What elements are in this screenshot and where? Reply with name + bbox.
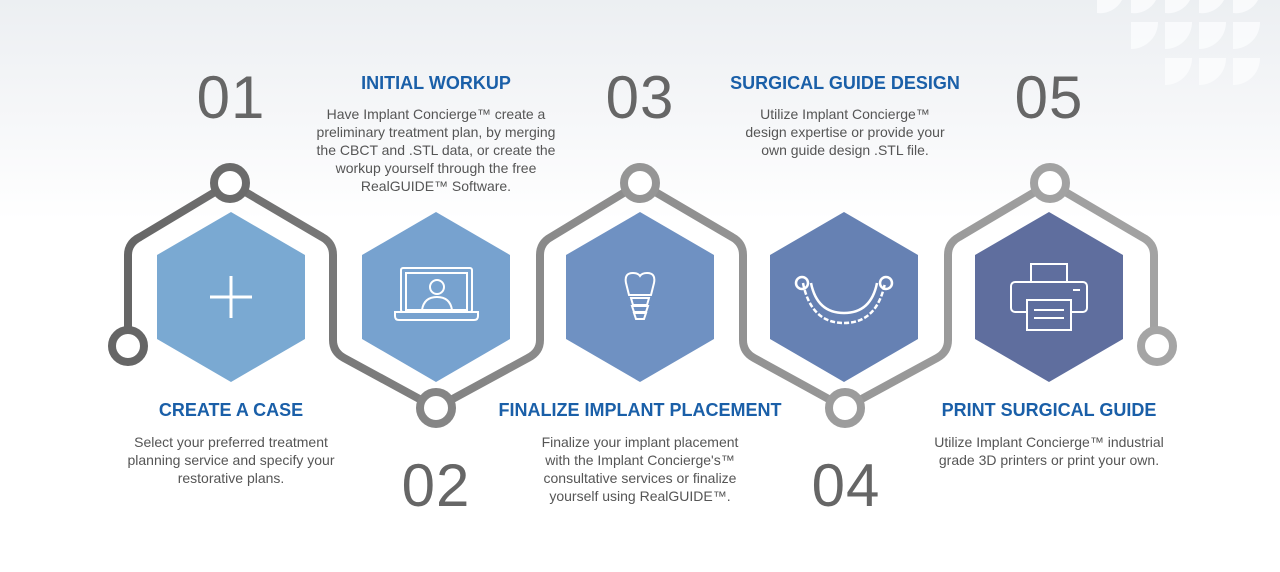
text: finalize implant placement: with the Implant Concierge's™: [545, 452, 735, 468]
node circles: [112, 167, 1173, 424]
text: finalize implant placement: Finalize your implant placement: [542, 434, 738, 450]
heading: create a case: CREATE A CASE: [159, 400, 303, 420]
heading: initial workup: INITIAL WORKUP: [361, 73, 511, 93]
text: initial workup: the CBCT and .STL data, or create the: [317, 142, 555, 158]
text: create a case: planning service and specify your: [127, 452, 335, 468]
number 04: 04: [812, 452, 880, 519]
text: surgical guide design: own guide design .STL file.: [761, 142, 929, 158]
text: initial workup: workup yourself through the free: [336, 160, 536, 176]
icon: printer: [1011, 264, 1087, 330]
text: initial workup: [316, 106, 555, 194]
text: surgical guide design: Utilize Implant Concierge™: [760, 106, 930, 122]
text: finalize implant placement: consultative services or finalize: [544, 470, 736, 486]
text: create a case: Select your preferred treatment: [134, 434, 328, 450]
icon: surgical guide: [796, 277, 892, 323]
heading: surgical guide design: SURGICAL GUIDE DESIGN: [730, 73, 960, 93]
number 01: 01: [197, 64, 265, 131]
text: initial workup: preliminary treatment plan, by merging: [317, 124, 555, 140]
connector line: [128, 183, 1154, 408]
text: print surgical guide: Utilize Implant Concierge™ industrial: [934, 434, 1164, 450]
text: create a case: [127, 434, 335, 486]
text: print surgical guide: [934, 434, 1164, 468]
icon: tooth implant: [626, 273, 654, 319]
text: print surgical guide: grade 3D printers or print your own.: [939, 452, 1159, 468]
number 02: 02: [402, 452, 470, 519]
text: create a case: restorative plans.: [178, 470, 284, 486]
decorative pattern top right: [1097, 0, 1260, 85]
text: initial workup: RealGUIDE™ Software.: [361, 178, 511, 194]
icon: laptop: [395, 268, 478, 320]
heading: finalize implant placement: FINALIZE IMPLANT PLACEMENT: [499, 400, 781, 420]
text: surgical guide design: [745, 106, 945, 158]
number 05: 05: [1015, 64, 1083, 131]
text: initial workup: Have Implant Concierge™ create a: [327, 106, 545, 122]
number 03: 03: [606, 64, 674, 131]
hexagons: [157, 212, 1123, 382]
text: finalize implant placement: yourself using RealGUIDE™.: [549, 488, 731, 504]
text: surgical guide design: design expertise or provide your: [745, 124, 945, 140]
heading: print surgical guide: PRINT SURGICAL GUIDE: [942, 400, 1156, 420]
icon: plus: [210, 276, 252, 318]
text: finalize implant placement: [542, 434, 738, 504]
